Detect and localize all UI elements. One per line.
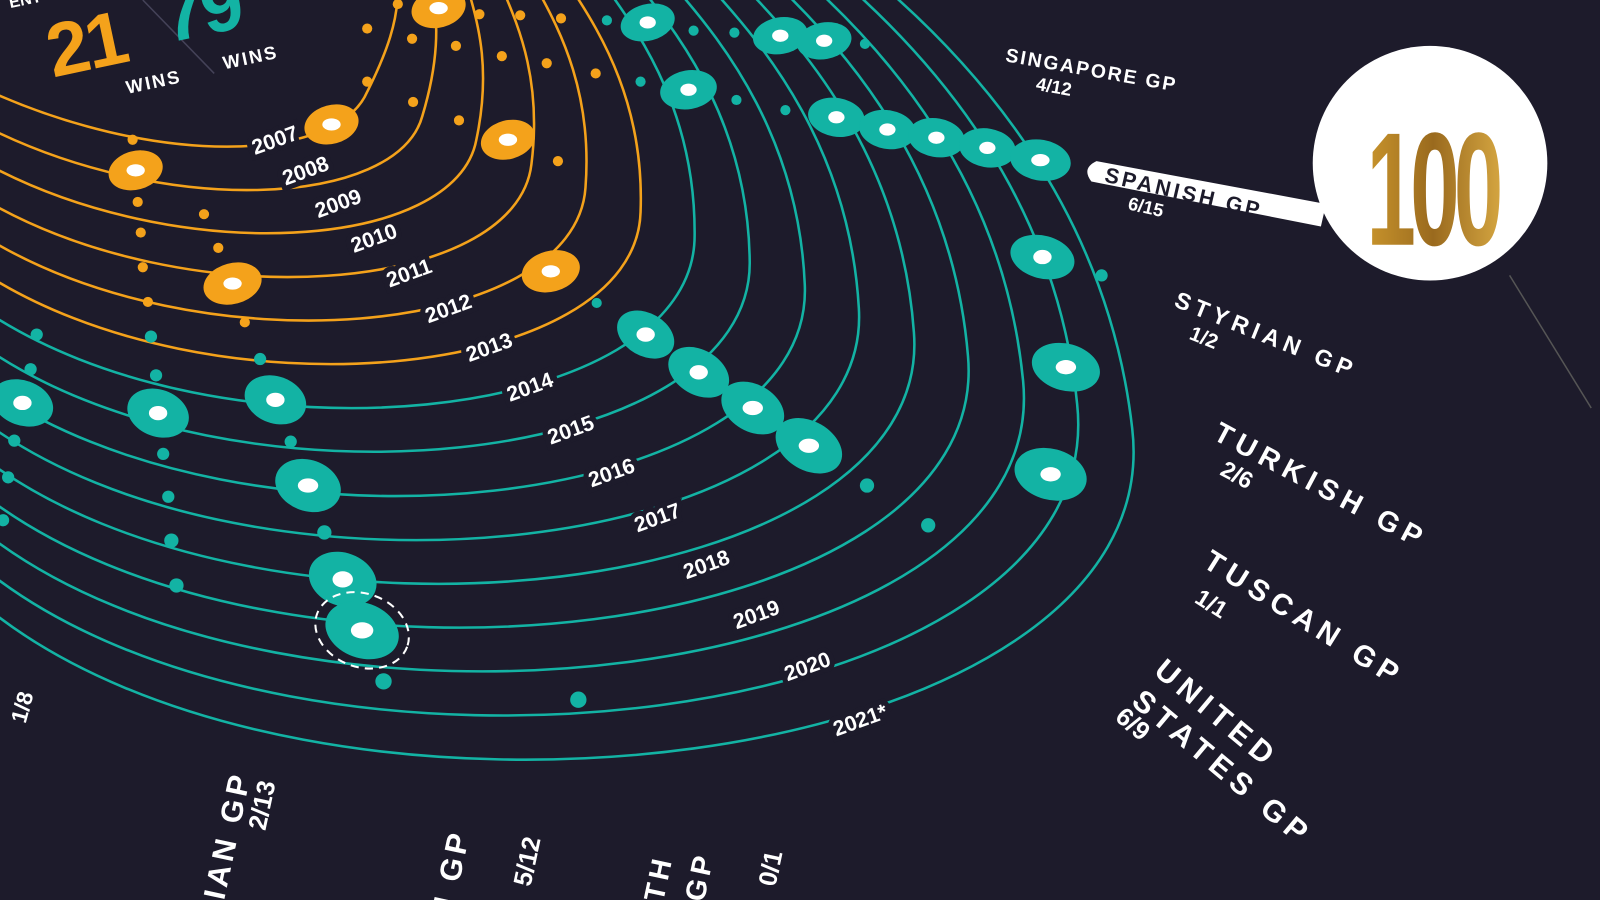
year labels: 2011 <box>383 254 435 292</box>
year labels: 2015 <box>544 411 597 449</box>
year labels: 2010 <box>347 219 400 258</box>
year labels: 2013 <box>463 328 516 367</box>
year labels <box>249 121 891 741</box>
year labels: 2008 <box>279 151 332 190</box>
GP labels right: UNITED <box>1148 653 1285 775</box>
GP labels right: SPANISH GP <box>1103 163 1265 223</box>
year labels: 2019 <box>730 595 783 634</box>
GP labels right: 4/12 <box>1035 73 1073 100</box>
year labels: 2016 <box>585 453 638 492</box>
GP labels bottom: 5/12 <box>509 834 547 889</box>
GP labels bottom: 2/13 <box>244 778 281 833</box>
GP labels right: 2/6 <box>1217 456 1258 494</box>
GP labels right: 6/15 <box>1126 193 1166 221</box>
GP labels bottom: 1/8 <box>6 689 38 725</box>
year labels: 2007 <box>249 121 301 160</box>
GP labels right: TUSCAN GP <box>1198 544 1410 694</box>
year labels: 2020 <box>781 647 834 686</box>
GP labels right <box>1004 44 1433 853</box>
100 badge: 100 <box>1367 99 1500 279</box>
year labels: 2009 <box>312 184 365 223</box>
headline stats <box>7 0 280 98</box>
GP labels right: 1/2 <box>1186 323 1221 354</box>
GP labels right: 6/9 <box>1110 702 1155 746</box>
headline stats: WINS <box>221 41 280 73</box>
GP labels right: STYRIAN GP <box>1171 287 1361 383</box>
GP labels bottom <box>6 689 788 900</box>
headline stats: WINS <box>124 66 183 98</box>
race win markers <box>0 0 1108 708</box>
GP labels bottom: 0/1 <box>754 848 788 889</box>
GP labels right: 1/1 <box>1191 584 1232 623</box>
GP labels right: SINGAPORE GP <box>1004 44 1179 96</box>
GP labels right: STATES GP <box>1126 683 1319 853</box>
year labels: 2012 <box>422 289 475 328</box>
year labels: 2021* <box>830 699 891 741</box>
GP labels right: TURKISH GP <box>1208 417 1433 556</box>
year labels: 2014 <box>504 368 557 407</box>
year labels: 2018 <box>680 545 733 584</box>
year labels: 2017 <box>631 498 684 537</box>
year arcs <box>0 0 1134 760</box>
100 badge <box>1313 46 1591 408</box>
